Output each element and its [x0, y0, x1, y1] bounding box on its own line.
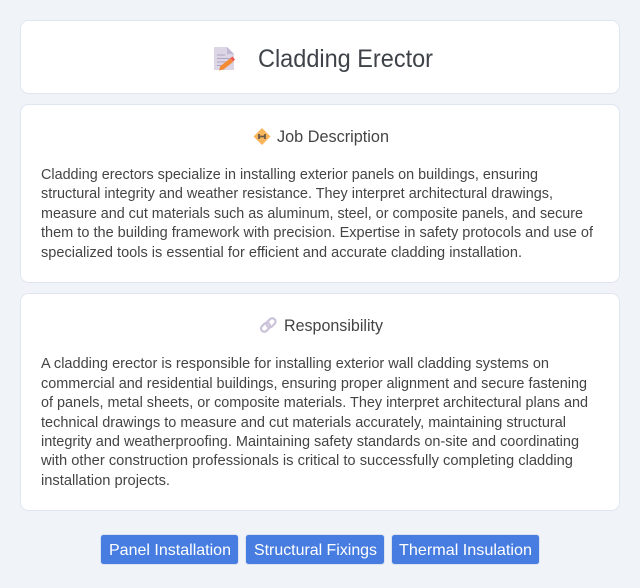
job description text: them to the building framework with precision. Expertise in safety protocols and use of [41, 225, 594, 241]
tag: structural fixings [246, 534, 384, 564]
tag: structural fixings: Structural Fixings [254, 542, 377, 559]
panel: title card [20, 20, 620, 94]
responsibility text: commercial and residential buildings, ensuring proper alignment and secure fastening [41, 376, 587, 392]
responsibility text: integrity and weatherproofing. Maintaining safety standards on-site and coordinating [41, 434, 579, 450]
responsibility text: with other construction professionals is critical to successfully completing cladding [40, 453, 573, 469]
responsibility text [40, 356, 588, 489]
job description text [41, 167, 594, 261]
responsibility text: of panels, metal sheets, or composite materials. They interpret architectural plans and [41, 395, 588, 411]
icon: document with pencil [214, 47, 235, 70]
icon: diamond road sign [254, 128, 270, 145]
job description text: structural integrity and weather resistance. They interpret architectural drawings, [41, 186, 553, 202]
responsibility text: installation projects. [41, 473, 170, 489]
job description text: specialized tools is essential for efficient and accurate cladding installation. [41, 245, 522, 261]
tag: thermal insulation: Thermal Insulation [399, 542, 532, 559]
responsibility text: technical drawings to measure and cut materials accurately, maintaining structural [41, 415, 566, 431]
tag: thermal insulation [392, 534, 540, 564]
heading: responsibility: Responsibility [284, 316, 384, 335]
title: Cladding Erector [258, 45, 433, 73]
responsibility text: A cladding erector is responsible for installing exterior wall cladding systems on [41, 356, 549, 372]
job description text: measure and cut materials such as aluminum, steel, or composite panels, and secure [41, 206, 583, 222]
panel: job description [20, 104, 620, 282]
job description text: Cladding erectors specialize in installing exterior panels on buildings, ensuring [41, 167, 538, 183]
panel: responsibility [20, 294, 620, 510]
tag: panel installation: Panel Installation [109, 542, 231, 559]
tag: panel installation [100, 534, 238, 564]
icon: chain link [260, 317, 277, 333]
heading: job description: Job Description [277, 127, 389, 146]
